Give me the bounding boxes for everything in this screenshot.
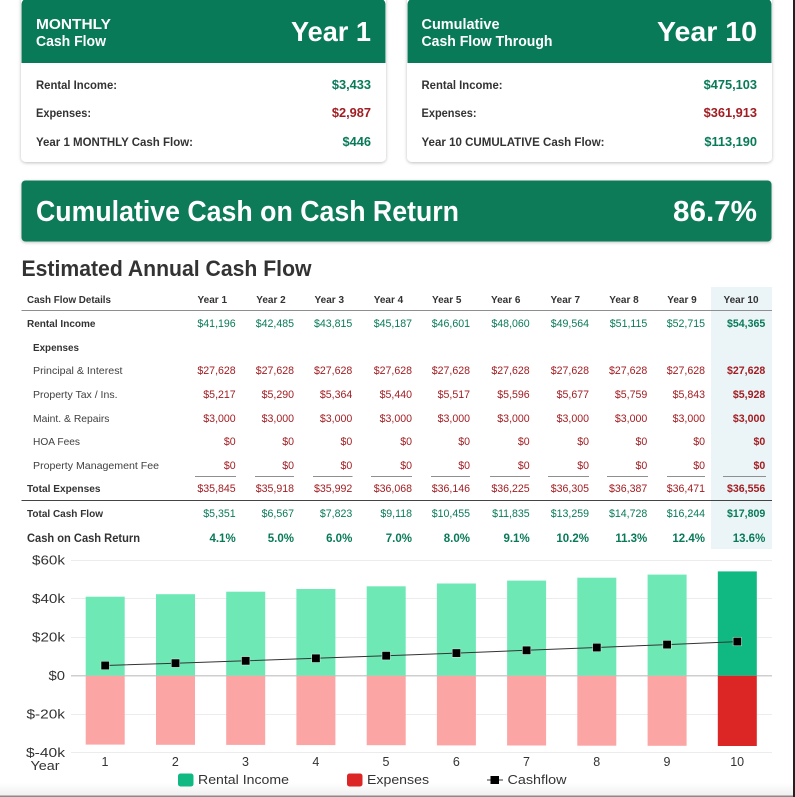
banner: cumulative cash on cash return: Cumulative Cash on Cash Return: [36, 196, 459, 228]
table header row: Year 6: [491, 295, 521, 306]
row: hoa fees: $0: [518, 436, 530, 448]
card header: monthly: MONTHLY: [36, 17, 111, 33]
panel: monthly cash flow card: [21, 0, 386, 162]
row: cash on cash return: 7.0%: [386, 533, 412, 545]
row: property management fee: $0: [224, 460, 236, 472]
row: cash on cash return: 9.1%: [503, 533, 530, 545]
row: maintenance and repairs: $3,000: [320, 413, 352, 425]
row: total expenses: $35,845: [197, 483, 236, 495]
card rows: monthly: Expenses:: [36, 108, 91, 120]
legend: cashflow: Cashflow: [508, 772, 567, 787]
row: total expenses: $36,305: [551, 483, 589, 495]
row: maintenance and repairs: $3,000: [673, 413, 705, 425]
row: total expenses: $35,918: [256, 483, 294, 495]
row: property management fee: $0: [400, 460, 412, 472]
card rows: cumulative: Expenses:: [422, 108, 476, 120]
row: maintenance and repairs: $3,000: [380, 413, 412, 425]
row: total expenses: $36,471: [667, 483, 705, 495]
x axis labels: 6: [453, 755, 460, 769]
row: property tax and insurance: $5,843: [673, 389, 705, 401]
card rows: cumulative: Rental Income:: [422, 80, 502, 92]
card rows: monthly: Rental Income:: [36, 80, 117, 92]
row: principal and interest: $27,628: [609, 365, 647, 377]
row: cash on cash return: 8.0%: [444, 533, 470, 545]
row: property management fee: [33, 460, 765, 472]
legend: expenses: Expenses: [367, 772, 430, 787]
row: principal and interest: Principal & Interest: [33, 366, 123, 377]
row: principal and interest: $27,628: [197, 365, 236, 377]
card rows: cumulative: $113,190: [704, 134, 757, 149]
row: total cash flow: $9,118: [380, 508, 412, 520]
y axis labels: $-40k: [26, 746, 66, 760]
table header row: Year 8: [609, 295, 639, 306]
row: total cash flow: [27, 508, 765, 520]
x axis labels: 1: [102, 755, 109, 769]
y axis labels: $0: [48, 669, 65, 683]
row: property tax and insurance: Property Tax / Ins.: [33, 390, 118, 401]
row: principal and interest: $27,628: [727, 365, 765, 377]
row: total expenses: $36,556: [727, 483, 765, 495]
row: maintenance and repairs: $3,000: [203, 413, 236, 425]
row: total expenses: [27, 483, 765, 495]
x axis labels: 4: [312, 755, 319, 769]
row: property tax and insurance: $5,677: [557, 389, 589, 401]
row: total expenses: $36,068: [374, 483, 412, 495]
row: total expenses: $36,387: [609, 483, 647, 495]
row: rental income: $52,715: [667, 318, 705, 330]
row: total cash flow: $10,455: [432, 508, 470, 520]
row: total cash flow: $17,809: [727, 508, 765, 520]
row: cash on cash return: 10.2%: [556, 533, 589, 545]
x axis labels: 5: [383, 755, 390, 769]
table header row: Year 9: [667, 295, 697, 306]
card header: monthly: Year 1: [291, 16, 371, 47]
card rows: cumulative: [422, 77, 757, 149]
row: hoa fees: HOA Fees: [33, 437, 80, 448]
row: rental income: $46,601: [432, 318, 470, 330]
card rows: monthly: $3,433: [332, 77, 371, 92]
row: hoa fees: $0: [458, 436, 470, 448]
row: property management fee: $0: [282, 460, 294, 472]
row: rental income: $54,365: [727, 318, 765, 330]
row: hoa fees: $0: [636, 436, 647, 448]
row: rental income: $48,060: [491, 318, 530, 330]
row: principal and interest: $27,628: [551, 365, 589, 377]
card rows: cumulative: $475,103: [704, 77, 757, 92]
row: hoa fees: $0: [341, 436, 352, 448]
row: hoa fees: $0: [282, 436, 294, 448]
y axis labels: $-20k: [26, 708, 66, 722]
row: total cash flow: $14,728: [609, 508, 647, 520]
chart: income, expenses and cashflow by year: [26, 554, 772, 773]
row: property management fee: $0: [636, 460, 647, 472]
card rows: monthly: $2,987: [332, 105, 371, 120]
row: rental income: [27, 318, 765, 330]
row: property tax and insurance: $5,290: [262, 389, 294, 401]
row: total expenses: $35,992: [314, 483, 352, 495]
card header: monthly: Cash Flow: [36, 34, 107, 50]
year 10 highlight column: [711, 287, 772, 549]
y axis labels: [26, 554, 66, 760]
row: principal and interest: $27,628: [491, 365, 530, 377]
card rows: monthly: [36, 77, 371, 149]
row: total cash flow: $7,823: [320, 508, 352, 520]
row: principal and interest: $27,628: [314, 365, 352, 377]
row: property tax and insurance: $5,217: [203, 389, 236, 401]
row: rental income: $42,485: [256, 318, 294, 330]
x axis labels: 9: [664, 755, 671, 769]
card rows: cumulative: $361,913: [704, 105, 757, 120]
row: maintenance and repairs: $3,000: [438, 413, 470, 425]
table header row: Year 1: [198, 295, 227, 306]
row: property tax and insurance: $5,440: [380, 389, 412, 401]
row: rental income: $49,564: [551, 318, 589, 330]
row: cash on cash return: 13.6%: [733, 533, 765, 545]
row: rental income: $43,815: [314, 318, 352, 330]
table: annual cash flow: [22, 287, 772, 549]
y axis labels: $20k: [32, 630, 66, 644]
row: expenses label: Expenses: [33, 343, 79, 354]
cashflow markers: [101, 637, 742, 670]
panel: cumulative cash flow card: [407, 0, 772, 162]
row: property management fee: $0: [518, 460, 530, 472]
x axis labels: [102, 755, 744, 769]
table header row: Year 7: [551, 295, 580, 306]
table header row: [27, 295, 759, 306]
table header row: Year 2: [256, 295, 286, 306]
row: property tax and insurance: $5,759: [615, 389, 647, 401]
row: cash on cash return: 4.1%: [209, 533, 236, 545]
y axis labels: $60k: [32, 554, 66, 568]
table header row: Year 3: [315, 295, 344, 306]
row: cash on cash return: 12.4%: [672, 533, 705, 545]
row: hoa fees: $0: [693, 436, 705, 448]
row: principal and interest: $27,628: [667, 365, 705, 377]
banner: cumulative cash on cash return: 86.7%: [673, 196, 757, 228]
row: total cash flow: Total Cash Flow: [27, 509, 103, 520]
cashflow line: [105, 642, 737, 666]
row: property management fee: $0: [341, 460, 352, 472]
row: total cash flow: $6,567: [262, 508, 294, 520]
expense bars: [86, 676, 757, 746]
row: total cash flow: $5,351: [203, 508, 236, 520]
row: maintenance and repairs: $3,000: [557, 413, 589, 425]
x axis labels: 7: [523, 755, 530, 769]
row: cash on cash return: [27, 533, 765, 545]
x axis labels: 10: [730, 755, 744, 769]
row: total expenses: $36,225: [491, 483, 530, 495]
card header: monthly: [22, 0, 386, 63]
row: property tax and insurance: $5,364: [320, 389, 352, 401]
row: property tax and insurance: $5,928: [733, 389, 765, 401]
legend: rental income: Rental Income: [198, 772, 289, 787]
row: property tax and insurance: $5,596: [497, 389, 530, 401]
row: hoa fees: $0: [754, 436, 765, 448]
table header row: Year 4: [374, 295, 404, 306]
row: cash on cash return: 6.0%: [326, 533, 352, 545]
row: maintenance and repairs: $3,000: [497, 413, 530, 425]
card header: cumulative: Year 10: [657, 16, 757, 47]
row: cash on cash return: 5.0%: [268, 533, 294, 545]
x axis title: Year: [30, 758, 60, 773]
row: property tax and insurance: $5,517: [438, 389, 470, 401]
table header row: Year 5: [432, 295, 462, 306]
row: maintenance and repairs: $3,000: [733, 413, 765, 425]
row: rental income: Rental Income: [27, 319, 96, 330]
row: cash on cash return: Cash on Cash Return: [27, 533, 140, 545]
row: total expenses: Total Expenses: [27, 484, 101, 495]
row: hoa fees: $0: [400, 436, 412, 448]
card rows: monthly: Year 1 MONTHLY Cash Flow:: [36, 137, 193, 149]
row: property management fee: $0: [458, 460, 470, 472]
row: total cash flow: $13,259: [551, 508, 589, 520]
row: maintenance and repairs: Maint. & Repairs: [33, 414, 110, 425]
row: maintenance and repairs: $3,000: [262, 413, 294, 425]
row: total expenses: $36,146: [432, 483, 470, 495]
card header: cumulative: Cash Flow Through: [422, 34, 552, 50]
x axis labels: 8: [593, 755, 600, 769]
row: cash on cash return: 11.3%: [615, 533, 647, 545]
legend: cashflow: [487, 772, 567, 787]
row: principal and interest: $27,628: [432, 365, 470, 377]
x axis labels: 2: [172, 755, 179, 769]
row: maintenance and repairs: [33, 413, 765, 425]
y axis labels: $40k: [32, 592, 66, 606]
row: property management fee: $0: [754, 460, 765, 472]
row: rental income: $45,187: [374, 318, 412, 330]
row: principal and interest: $27,628: [374, 365, 412, 377]
card header: cumulative: Cumulative: [422, 17, 500, 33]
card rows: monthly: $446: [343, 134, 371, 149]
table header row: Year 10: [723, 295, 759, 306]
row: maintenance and repairs: $3,000: [615, 413, 647, 425]
row: hoa fees: $0: [577, 436, 589, 448]
legend: expenses: [347, 772, 430, 787]
x axis labels: 3: [242, 755, 249, 769]
row: principal and interest: [33, 365, 765, 377]
row: hoa fees: $0: [224, 436, 236, 448]
row: total cash flow: $11,835: [492, 508, 530, 520]
banner: cumulative cash on cash return: [22, 180, 772, 242]
row: rental income: $41,196: [197, 318, 236, 330]
income bars: [86, 571, 757, 676]
row: property management fee: $0: [577, 460, 589, 472]
row: property tax and insurance: [33, 389, 765, 401]
row: property management fee: $0: [693, 460, 705, 472]
row: hoa fees: [33, 436, 765, 448]
table header row: Cash Flow Details: [27, 295, 111, 306]
row: principal and interest: $27,628: [256, 365, 294, 377]
legend: [178, 772, 567, 787]
row: total cash flow: $16,244: [667, 508, 705, 520]
card rows: cumulative: Year 10 CUMULATIVE Cash Flow:: [422, 137, 604, 149]
card header: cumulative: [408, 0, 772, 63]
row: rental income: $51,115: [610, 318, 647, 330]
heading: estimated annual cash flow: Estimated Annual Cash Flow: [22, 256, 312, 281]
row: property management fee: Property Management Fee: [33, 461, 159, 472]
